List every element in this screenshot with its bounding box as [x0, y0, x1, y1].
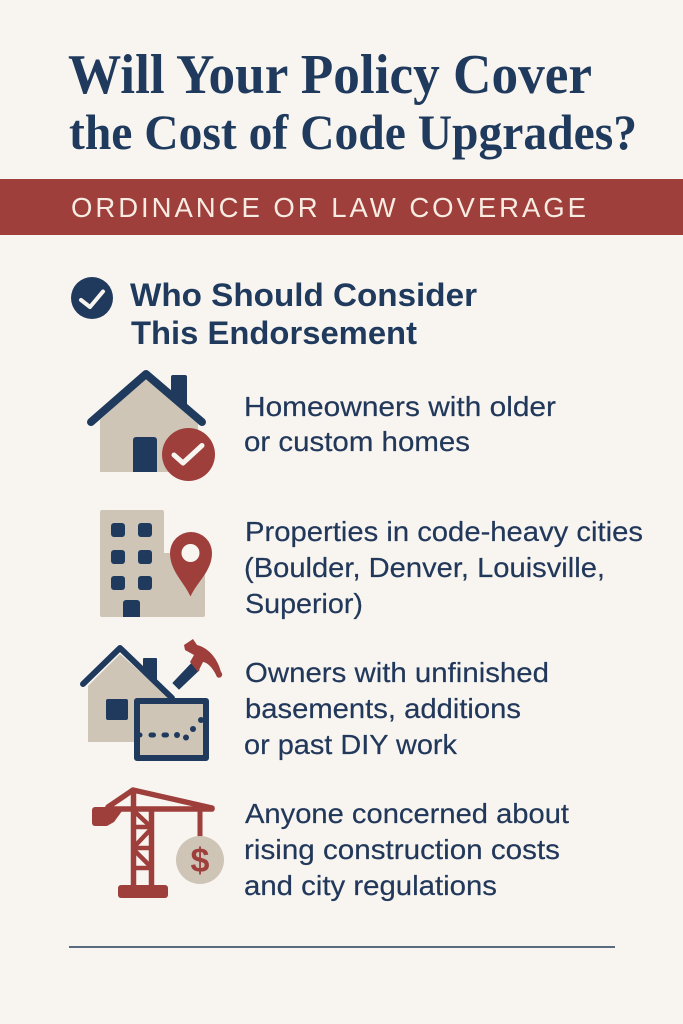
banner: ordinance or law coverage: ORDINANCE OR LAW COVERAGE: [71, 192, 586, 223]
icon: building with map pin: [100, 510, 212, 617]
item 3: unfinished basements, additions, DIY: [83, 639, 549, 760]
text: Anyone concerned about: [245, 798, 569, 829]
title: [68, 44, 637, 160]
text: Superior): [245, 588, 363, 619]
text: [244, 657, 549, 760]
item 1: older or custom homes: [91, 374, 556, 481]
text: and city regulations: [244, 870, 497, 901]
title: Will Your Policy Cover: [68, 44, 592, 106]
text: (Boulder, Denver, Louisville,: [244, 552, 605, 583]
icon: crane with dollar coin: $: [191, 842, 210, 880]
icon: crane with dollar coin: [92, 790, 224, 898]
icon: check circle: [71, 277, 113, 319]
banner: ordinance or law coverage: [0, 179, 683, 235]
text: rising construction costs: [244, 834, 560, 865]
icon: house, hammer and floor plan: [83, 639, 222, 758]
text: Homeowners with older: [244, 391, 556, 422]
text: [244, 391, 556, 457]
heading text: Who Should Consider: [130, 277, 477, 313]
title: the Cost of Code Upgrades?: [69, 104, 637, 160]
text: basements, additions: [245, 693, 521, 724]
text: or custom homes: [244, 426, 470, 457]
heading text: This Endorsement: [131, 315, 417, 351]
text: Properties in code-heavy cities: [245, 516, 643, 547]
bottom rule: [69, 946, 615, 948]
heading text: [130, 277, 477, 351]
text: [244, 798, 569, 901]
text: Owners with unfinished: [245, 657, 549, 688]
icon: house with check: [91, 374, 215, 481]
item 4: construction costs and regulations: [92, 790, 569, 901]
item 2: code-heavy cities: [100, 510, 643, 619]
section heading: [71, 277, 477, 351]
text: [244, 516, 643, 619]
text: or past DIY work: [244, 729, 458, 760]
